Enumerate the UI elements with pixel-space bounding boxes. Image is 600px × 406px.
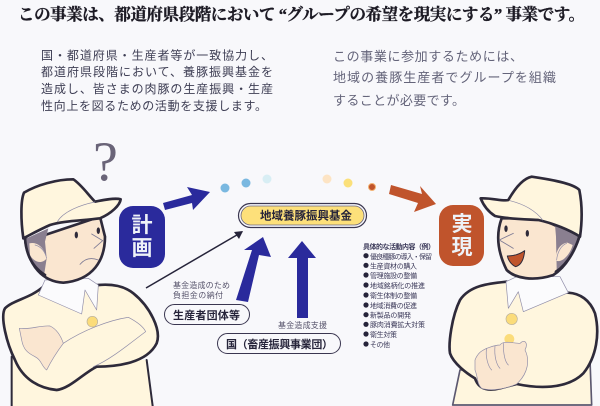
list: example activities: 優良種豚の導入・保留	[370, 252, 432, 261]
list: example activities	[363, 242, 435, 349]
text block: participation: 地域の養豚生産者でグループを組織	[333, 70, 556, 85]
fund pill: 地域養豚振興基金	[260, 208, 352, 222]
text block: participation	[333, 49, 556, 108]
pill: producer groups	[164, 304, 250, 324]
text block: fund description	[41, 48, 273, 113]
label: contribution payment: 負担金の納付	[173, 290, 223, 300]
pill: state agency	[218, 334, 340, 354]
label: contribution payment: 基金造成のため	[173, 280, 230, 290]
illustration: happy farmer	[450, 177, 597, 405]
pill: producer groups: 生産者団体等	[173, 308, 240, 322]
list: example activities: 新製品の開発	[370, 310, 411, 320]
badge: realization: 現	[452, 236, 472, 259]
list: example activities: その他	[370, 340, 390, 349]
text block: fund description: 国・都道府県・生産者等が一致協力し、	[41, 48, 273, 62]
badge: realization	[439, 205, 484, 266]
dots: progress trail	[220, 174, 376, 192]
label: contribution payment	[173, 280, 230, 300]
list: example activities: 衛生対策	[370, 330, 397, 339]
text block: participation: この事業に参加するためには、	[333, 49, 523, 64]
title: この事業は、都道府県段階において “グループの希望を現実にする” 事業です。	[18, 4, 585, 24]
list: example activities: 地域銘柄化の推進	[370, 281, 425, 290]
label: fund support: 基金造成支援	[278, 320, 327, 330]
badge: realization: 実	[452, 213, 472, 236]
arrow: to realization	[389, 185, 436, 212]
icon: question mark: ?	[93, 131, 118, 193]
fund pill	[238, 204, 366, 228]
list: example activities: 地域消費の促進	[370, 301, 417, 310]
text block: fund description: 都道府県段階において、養豚振興基金を	[41, 64, 273, 79]
badge: plan: 計	[132, 214, 152, 237]
text block: fund description: 性向上を図るための活動を支援します。	[41, 98, 267, 113]
arrow: plan to fund	[163, 187, 210, 210]
list: example activities: 管理施設の整備	[370, 271, 417, 280]
list: example activities: 豚肉消費拡大対策	[370, 320, 425, 329]
arrow: state to fund	[288, 241, 316, 318]
pill: state agency: 国（畜産振興事業団）	[226, 337, 333, 351]
arrow: thin contribution line	[146, 231, 243, 288]
list: example activities: 生産資材の購入	[370, 262, 417, 270]
list: example activities: 衛生体制の整備	[370, 291, 417, 300]
arrow: producers to fund	[236, 237, 271, 302]
badge: plan: 画	[132, 237, 152, 260]
list: example activities: 具体的な活動内容（例）	[363, 242, 435, 251]
text block: participation: することが必要です。	[333, 93, 465, 108]
text block: fund description: 造成し、皆さまの肉豚の生産振興・生産	[41, 82, 273, 96]
illustration: worried farmer	[3, 179, 158, 406]
badge: plan	[119, 206, 165, 268]
